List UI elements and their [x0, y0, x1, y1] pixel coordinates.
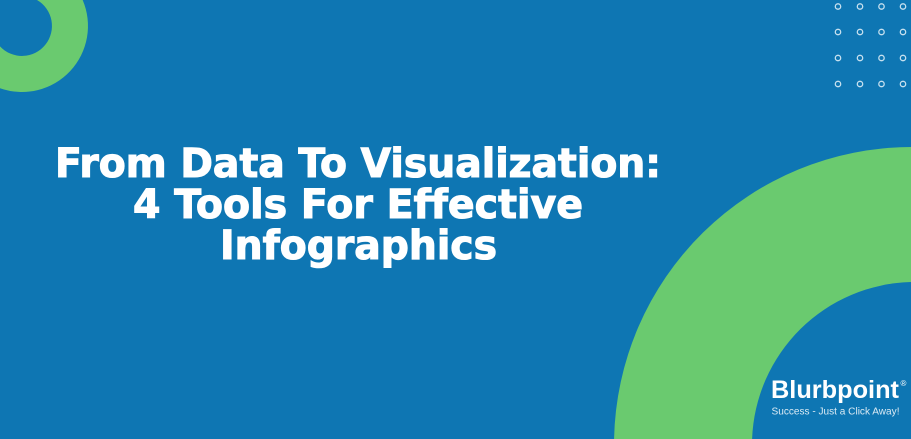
- green arc bottom-right: [614, 147, 911, 439]
- title: From Data To Visualization:: [55, 141, 661, 187]
- logo: Blurbpoint: [771, 376, 906, 418]
- logo: Blurbpoint: Blurbpoint: [771, 376, 900, 404]
- title: [55, 141, 661, 269]
- green ring top-left: [0, 0, 88, 92]
- logo: Blurbpoint: ®: [900, 379, 906, 388]
- logo: Blurbpoint: Success - Just a Click Away!: [772, 406, 900, 418]
- dot grid top-right: [835, 4, 906, 87]
- title: Infographics: [220, 223, 497, 269]
- title: 4 Tools For Effective: [133, 182, 583, 228]
